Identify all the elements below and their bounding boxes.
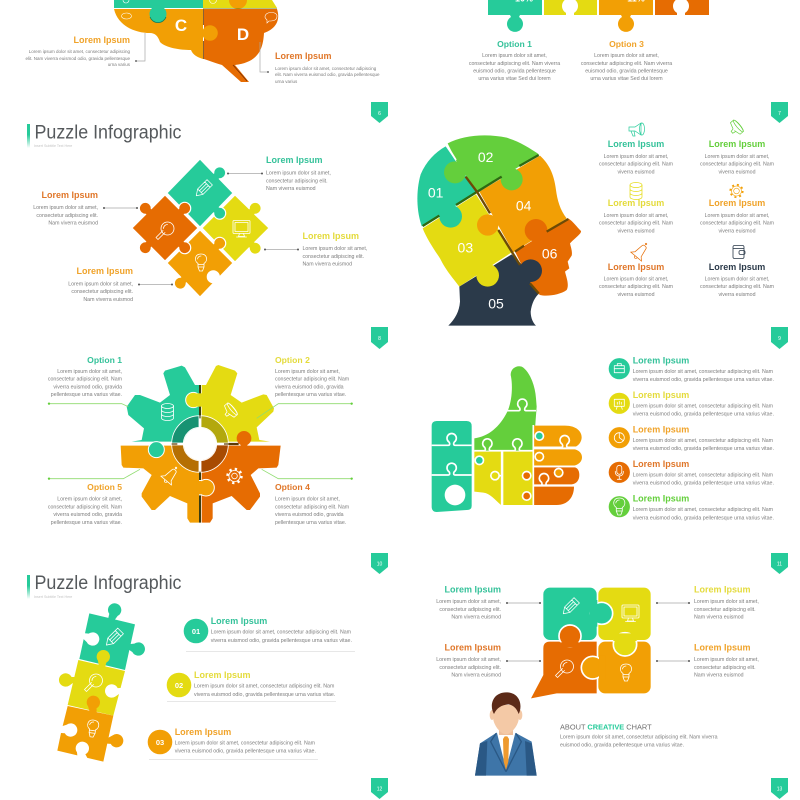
white seams [432,399,582,506]
list item 5 [609,494,774,522]
icon: magnifier [556,660,574,678]
page badge 13 [771,778,788,799]
option 2 [275,355,350,398]
option 4: pellentesque urna varius vitae. [275,520,346,526]
slide 13: speech bubble puzzle [436,584,788,799]
option 1: viverra euismod odio, gravida [53,384,122,390]
icon: bulb [620,664,632,681]
gear puzzle graphic [48,365,353,523]
callout: bottom left: Lorem Ipsum [444,642,501,652]
list item 4: Lorem Ipsum [633,459,689,469]
icon: bulb [86,719,99,738]
option 1: Option 1 [497,39,532,49]
item: navy wallet: viverra euismod [718,292,756,298]
callout: left: consectetur adipiscing elit. [36,213,98,219]
list item 2: Lorem Ipsum [633,390,689,400]
option 1 [469,39,560,82]
callout: right: Lorem ipsum dolor sit amet, consectetur adipiscing [275,66,377,71]
list item 01: viverra euismod odio, gravida pellentesque urna varius vitae. [211,638,352,644]
gear yellow piece [202,365,274,442]
callout: left: Nam viverra euismod [48,220,98,226]
callout: bottom left: Nam viverra euismod [83,297,133,303]
piece 02 [448,135,539,192]
icon: pencil [561,598,579,616]
option 1: Lorem ipsum dolor sit amet, [482,53,547,59]
list item 5: Lorem ipsum dolor sit amet, consectetur adipiscing elit. Nam [633,507,774,513]
list item 01: Lorem Ipsum [211,616,267,626]
callout: bottom right: Nam viverra euismod [694,672,744,678]
callout: top right [656,584,759,620]
list item 5: viverra euismod odio, gravida pellentesque urna varius vitae. [633,516,774,522]
option 2: Lorem ipsum dolor sit amet, [275,369,340,375]
callout: top right [227,155,331,192]
list item 03: Lorem Ipsum [175,727,231,737]
page badge 7 [771,102,788,123]
icon: speaker [221,402,239,420]
item: amber gear: Lorem Ipsum [709,198,765,208]
list item 01: 01 [192,627,200,636]
about text [560,722,718,748]
page badge 12 [371,778,388,799]
item: orange bell: consectetur adipiscing elit. Nam [599,284,674,290]
stack amber piece [57,696,123,762]
piece 05 [448,254,539,326]
item: amber gear: consectetur adipiscing elit. Nam [700,220,775,226]
page badge 11: 11 [777,562,782,568]
callout: left: elit. Nam viverra euismod odio, gravida pellentesque [25,56,130,61]
option 3: euismod odio, gravida pellentesque [585,68,668,74]
list item 3 [609,424,774,452]
title: Puzzle Infographic [34,573,182,594]
icon: monitor [233,220,250,237]
item: yellow database [599,182,674,234]
list item 02: Lorem Ipsum [194,670,251,680]
option 1: consectetur adipiscing elit. Nam viverra [469,61,560,67]
puzzle strip pieces [488,0,709,32]
callout: right: Lorem Ipsum [275,51,332,61]
page badge 10 [371,553,388,574]
page badge 10: 10 [377,562,382,568]
icon: pencil [194,180,212,198]
thumb [474,366,537,451]
list item 2: Lorem ipsum dolor sit amet, consectetur adipiscing elit. Nam [633,404,774,410]
callout: top left: Lorem Ipsum [444,584,501,594]
option 4: Option 4 [275,482,310,492]
item: navy wallet: consectetur adipiscing elit. Nam [700,284,775,290]
about text: ABOUT CREATIVE CHART [560,722,652,732]
slide 6: brain puzzle [25,0,388,123]
letter D: D [237,25,249,44]
icon: monitor [622,605,639,622]
callout: right: Nam viverra euismod [302,262,352,268]
option 5: pellentesque urna varius vitae. [51,520,122,526]
callout: left: urna varius [108,62,131,67]
option 3: Option 3 [609,39,644,49]
callout: bottom left: Lorem ipsum dolor sit amet, [68,282,133,288]
callout: right [264,231,367,268]
title: Insert Subtitle Text Here [34,595,72,599]
item: yellow database: Lorem Ipsum [608,198,664,208]
item: green speaker: Lorem Ipsum [709,139,765,149]
amber piece [167,230,233,297]
callout: left: Lorem Ipsum [41,190,98,200]
option 5: Lorem ipsum dolor sit amet, [57,496,122,502]
list item 3: Lorem ipsum dolor sit amet, consectetur adipiscing elit. Nam [633,438,774,444]
callout: right: urna varius [275,79,298,84]
list item 02: Lorem ipsum dolor sit amet, consectetur adipiscing elit. Nam [194,684,335,690]
page badge 9: 9 [778,336,781,342]
option 3: Lorem ipsum dolor sit amet, [594,53,659,59]
fingers [534,426,582,466]
page badge 9 [771,327,788,349]
page badge 13: 13 [777,786,782,792]
stack yellow piece [59,650,125,716]
palm [474,452,533,505]
page badge 7: 7 [778,111,781,117]
option 2: Option 2 [275,355,310,365]
piece 03 [423,194,513,287]
option 2: viverra euismod odio, gravida [275,384,344,390]
callout: top right: Lorem ipsum dolor sit amet, [694,599,759,605]
item: amber gear: viverra euismod [718,228,756,234]
list item 03 [148,727,318,760]
list item 4: Lorem ipsum dolor sit amet, consectetur adipiscing elit. Nam [633,472,774,478]
callout: top right: consectetur adipiscing elit. [694,607,756,613]
option 4: Lorem ipsum dolor sit amet, [275,496,340,502]
label 06: 06 [542,246,558,262]
list item 03: Lorem ipsum dolor sit amet, consectetur adipiscing elit. Nam [175,740,316,746]
icon: magnifier [84,674,102,692]
orange piece [132,195,198,261]
list item 5: Lorem Ipsum [633,494,689,504]
callout: bottom left: Nam viverra euismod [451,672,501,678]
item: green speaker [700,119,775,176]
interlock knobs [559,600,637,680]
item: orange bell [599,241,674,298]
item: navy wallet [700,246,775,298]
callout: top right: consectetur adipiscing elit. [266,178,328,184]
page badge 6: 6 [378,111,381,117]
item: orange bell: Lorem ipsum dolor sit amet, [604,276,668,282]
item: yellow database: Lorem ipsum dolor sit amet, [604,213,668,219]
slide 10: gear puzzle [48,355,388,574]
page badge 11 [771,553,788,574]
label 04: 04 [516,197,532,213]
item: navy wallet: Lorem Ipsum [709,262,765,272]
yellow piece [202,195,269,262]
callout: top right: Lorem Ipsum [694,584,751,594]
item: yellow database: viverra euismod [617,228,655,234]
callout: bottom right: Lorem Ipsum [694,642,751,652]
list item 02: 02 [175,681,183,690]
slide 11: thumbs up [432,356,788,574]
callout: bottom right [656,642,759,678]
list item 2: viverra euismod odio, gravida pellentesque urna varius vitae. [633,412,774,418]
callout: top right: Lorem ipsum dolor sit amet, [266,170,331,176]
callout: bottom left [68,266,173,303]
callout: left: Lorem ipsum dolor sit amet, [33,205,98,211]
list item 4: viverra euismod odio, gravida pellentesque urna varius vitae. [633,480,774,486]
slide 7: puzzle strip [469,0,788,123]
label 03: 03 [458,240,473,256]
callout: right: elit. Nam viverra euismod odio, gravida pellentesque [275,72,380,77]
callout: bottom right: consectetur adipiscing elit. [694,665,756,671]
businessman figure [475,692,537,776]
item: green speaker: Lorem ipsum dolor sit amet, [705,154,769,160]
option 1: urna varius vitae Sed dui lorem [478,76,551,82]
icon: database [162,404,174,420]
list item 03: 03 [156,738,164,747]
item: teal megaphone: consectetur adipiscing elit. Nam [599,162,674,168]
item: teal megaphone [599,123,674,176]
item: amber gear [700,185,775,234]
piece 01 [417,146,477,226]
page badge 8: 8 [378,336,381,342]
letter C: C [175,16,187,35]
option 3 [581,39,672,82]
list item 01 [184,616,355,652]
icon: pencil [104,628,123,648]
option 4: viverra euismod odio, gravida [275,512,344,518]
item: orange bell: Lorem Ipsum [608,262,664,272]
head puzzle graphic [417,135,581,326]
list item 3: Lorem Ipsum [633,424,689,434]
option 1: Option 1 [87,355,122,365]
item: yellow database: consectetur adipiscing elit. Nam [599,220,674,226]
gear amber piece [121,446,199,523]
icon: magnifier [156,222,174,240]
callout: top left [436,584,541,620]
diamond puzzle graphic [132,159,269,297]
gear orange piece [202,446,281,523]
puzzle knobs [475,432,563,500]
teal piece [167,159,233,227]
piece 06 [515,218,581,296]
about text: euismod odio, gravida pellentesque urna varius vitae. [560,742,684,748]
option 5: Option 5 [87,482,122,492]
icon: gear [228,469,242,483]
title: Insert Subtitle Text Here [34,144,72,148]
list item 1 [609,356,774,383]
option 5: consectetur adipiscing elit. Nam [48,504,123,510]
page badge 12: 12 [377,786,382,792]
option 2: consectetur adipiscing elit. Nam [275,376,350,382]
connector lines [49,404,352,479]
page badge 6 [371,102,388,123]
piece 04 [479,156,567,252]
callout: top left: consectetur adipiscing elit. [439,607,501,613]
option 5 [48,482,123,526]
list item 4 [609,459,774,486]
wrist [432,421,472,512]
gear teal piece [127,366,199,442]
slide 12: stacked puzzle [27,573,388,799]
callout: left [25,33,145,67]
item: green speaker: viverra euismod [718,170,756,176]
callout: bottom left: consectetur adipiscing elit. [71,289,133,295]
item: amber gear: Lorem ipsum dolor sit amet, [705,213,769,219]
callout: right: consectetur adipiscing elit. [302,254,364,260]
icon: bell [159,465,180,487]
callout: right: Lorem ipsum dolor sit amet, [302,246,367,252]
callout: right: Lorem Ipsum [302,231,359,241]
about text: Lorem ipsum dolor sit amet, consectetur adipiscing elit. Nam viverra [560,734,718,740]
option 1: pellentesque urna varius vitae. [51,392,122,398]
list item 03: viverra euismod odio, gravida pellentesque urna varius vitae. [175,749,316,755]
option 4: consectetur adipiscing elit. Nam [275,504,350,510]
callout: bottom left: Lorem Ipsum [76,266,133,276]
list item 1: Lorem Ipsum [633,356,689,366]
item: teal megaphone: Lorem Ipsum [608,139,664,149]
callout: bottom left: consectetur adipiscing elit. [439,665,501,671]
callout: top left: Nam viverra euismod [451,614,501,620]
callout: top right: Nam viverra euismod [694,614,744,620]
label 01: 01 [428,185,444,201]
option 4 [275,482,350,526]
callout: bottom left [436,642,541,678]
option 3: urna varius vitae Sed dui lorem [590,76,663,82]
callout: top right: Nam viverra euismod [266,186,316,192]
option 3: consectetur adipiscing elit. Nam viverra [581,61,672,67]
item: teal megaphone: viverra euismod [617,170,655,176]
icon: bulb [195,254,207,271]
callout: bottom right: Lorem ipsum dolor sit amet, [694,657,759,663]
list item 2 [609,390,774,418]
label 02: 02 [478,149,494,165]
list item 02: viverra euismod odio, gravida pellentesque urna varius vitae. [194,692,335,698]
brain puzzle graphic [114,0,278,82]
label 05: 05 [488,296,504,312]
callout: left [33,190,138,226]
item: green speaker: consectetur adipiscing elit. Nam [700,162,775,168]
stacked puzzle graphic [57,603,145,762]
list item 01: Lorem ipsum dolor sit amet, consectetur adipiscing elit. Nam [211,630,352,636]
list item 02 [167,670,336,702]
option 1: euismod odio, gravida pellentesque [473,68,556,74]
callout: right [260,42,380,84]
stack teal piece [79,603,145,670]
item: navy wallet: Lorem ipsum dolor sit amet, [705,276,769,282]
title: Puzzle Infographic [34,122,182,144]
list item 3: viverra euismod odio, gravida pellentesque urna varius vitae. [633,446,774,452]
center ring quadrants [172,416,228,472]
callout: bottom left: Lorem ipsum dolor sit amet, [436,657,501,663]
thumbs up puzzle graphic [432,366,582,512]
option 1 [48,355,123,398]
option 1: Lorem ipsum dolor sit amet, [57,369,122,375]
callout: left: Lorem ipsum dolor sit amet, consectetur adipiscing [29,49,130,54]
speech bubble puzzle graphic [531,588,651,698]
item: teal megaphone: Lorem ipsum dolor sit amet, [604,154,668,160]
option 2: pellentesque urna varius vitae. [275,392,346,398]
callout: left: Lorem Ipsum [73,35,130,45]
slide 8: diamond puzzle [27,122,388,349]
option 1: consectetur adipiscing elit. Nam [48,376,123,382]
item: orange bell: viverra euismod [617,292,655,298]
list item 1: viverra euismod odio, gravida pellentesque urna varius vitae. [633,377,774,383]
callout: top right: Lorem Ipsum [266,155,323,165]
option 5: viverra euismod odio, gravida [53,512,122,518]
list item 1: Lorem ipsum dolor sit amet, consectetur adipiscing elit. Nam [633,369,774,375]
slide 9: head puzzle [417,119,788,349]
callout: top left: Lorem ipsum dolor sit amet, [436,599,501,605]
page badge 8 [371,327,388,349]
